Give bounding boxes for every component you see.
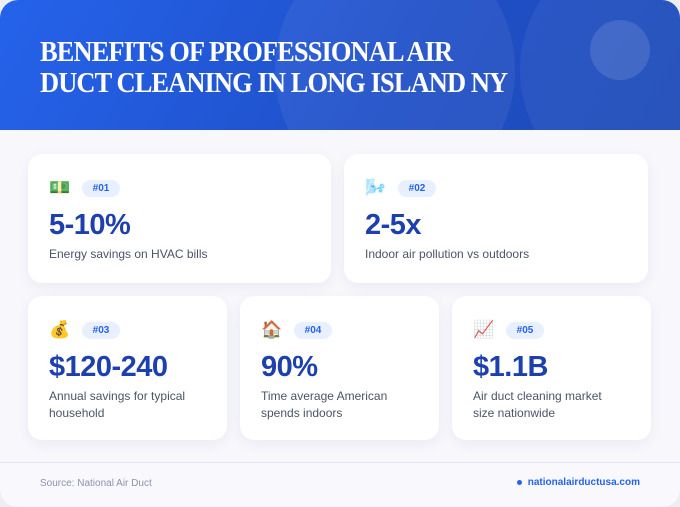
- label: Air duct cleaning market: [473, 389, 602, 403]
- label: Time average American: [261, 389, 387, 403]
- stat: $120-240: [49, 351, 168, 383]
- card 04: [240, 296, 439, 440]
- label: Indoor air pollution vs outdoors: [365, 247, 529, 261]
- badge 03: #03: [93, 325, 109, 336]
- badge 04: [294, 322, 332, 339]
- label: Energy savings on HVAC bills: [49, 247, 208, 261]
- icon: wind: 🌬️: [365, 178, 386, 197]
- card 05: [452, 296, 651, 440]
- source: Source: National Air Duct: [40, 478, 152, 489]
- label: spends indoors: [261, 406, 342, 420]
- label: household: [49, 406, 104, 420]
- label: [473, 389, 602, 420]
- stat: $1.1B: [473, 351, 548, 383]
- icon: money bag: 💰: [49, 320, 70, 339]
- stat: 90%: [261, 351, 318, 383]
- title: DUCT CLEANING IN LONG ISLAND NY: [40, 67, 507, 99]
- badge 02: [398, 180, 436, 197]
- icon: house: 🏠: [261, 320, 282, 339]
- label: size nationwide: [473, 406, 555, 420]
- badge 05: [506, 322, 544, 339]
- title: BENEFITS OF PROFESSIONAL AIR: [40, 36, 452, 68]
- stat: 5-10%: [49, 209, 130, 241]
- badge 03: [82, 322, 120, 339]
- label: [49, 389, 185, 420]
- header: [0, 0, 680, 130]
- icon: chart: 📈: [473, 320, 494, 339]
- badge 02: #02: [409, 183, 425, 194]
- card 02: [344, 154, 648, 283]
- title: [40, 36, 508, 99]
- footer: [0, 462, 680, 507]
- card 01: [28, 154, 331, 283]
- badge 01: #01: [93, 183, 109, 194]
- badge 04: #04: [305, 325, 321, 336]
- stat: 2-5x: [365, 209, 421, 241]
- icon: money: 💵: [49, 178, 70, 197]
- card 03: [28, 296, 227, 440]
- website: nationalairductusa.com: [528, 477, 640, 488]
- badge 01: [82, 180, 120, 197]
- badge 05: #05: [517, 325, 533, 336]
- label: [261, 389, 387, 420]
- label: Annual savings for typical: [49, 389, 185, 403]
